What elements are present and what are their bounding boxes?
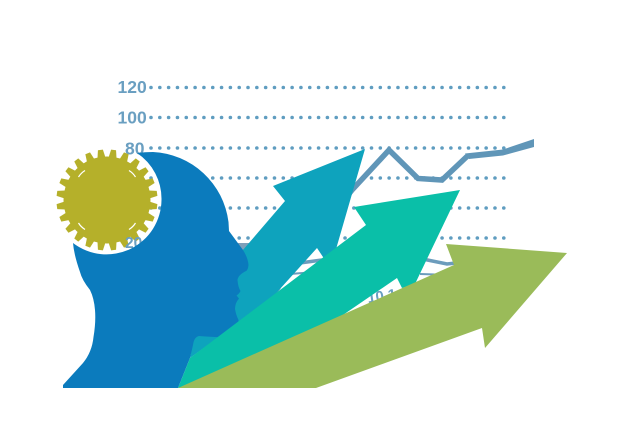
axis labels [118, 77, 147, 158]
line chart: upper series [340, 139, 534, 205]
line chart: lower series [233, 243, 456, 295]
arrow: teal blue [190, 149, 365, 358]
axis label fragment: 10 1 [366, 286, 397, 307]
head silhouette [63, 152, 248, 388]
axis labels: 80 [125, 138, 145, 158]
arrow: olive green [178, 244, 567, 388]
arrow: turquoise green [178, 190, 460, 388]
icon: gear [56, 149, 158, 251]
axis labels: 100 [118, 108, 147, 128]
axis labels: 120 [118, 77, 147, 97]
axis label: 20: 20 [125, 235, 142, 252]
